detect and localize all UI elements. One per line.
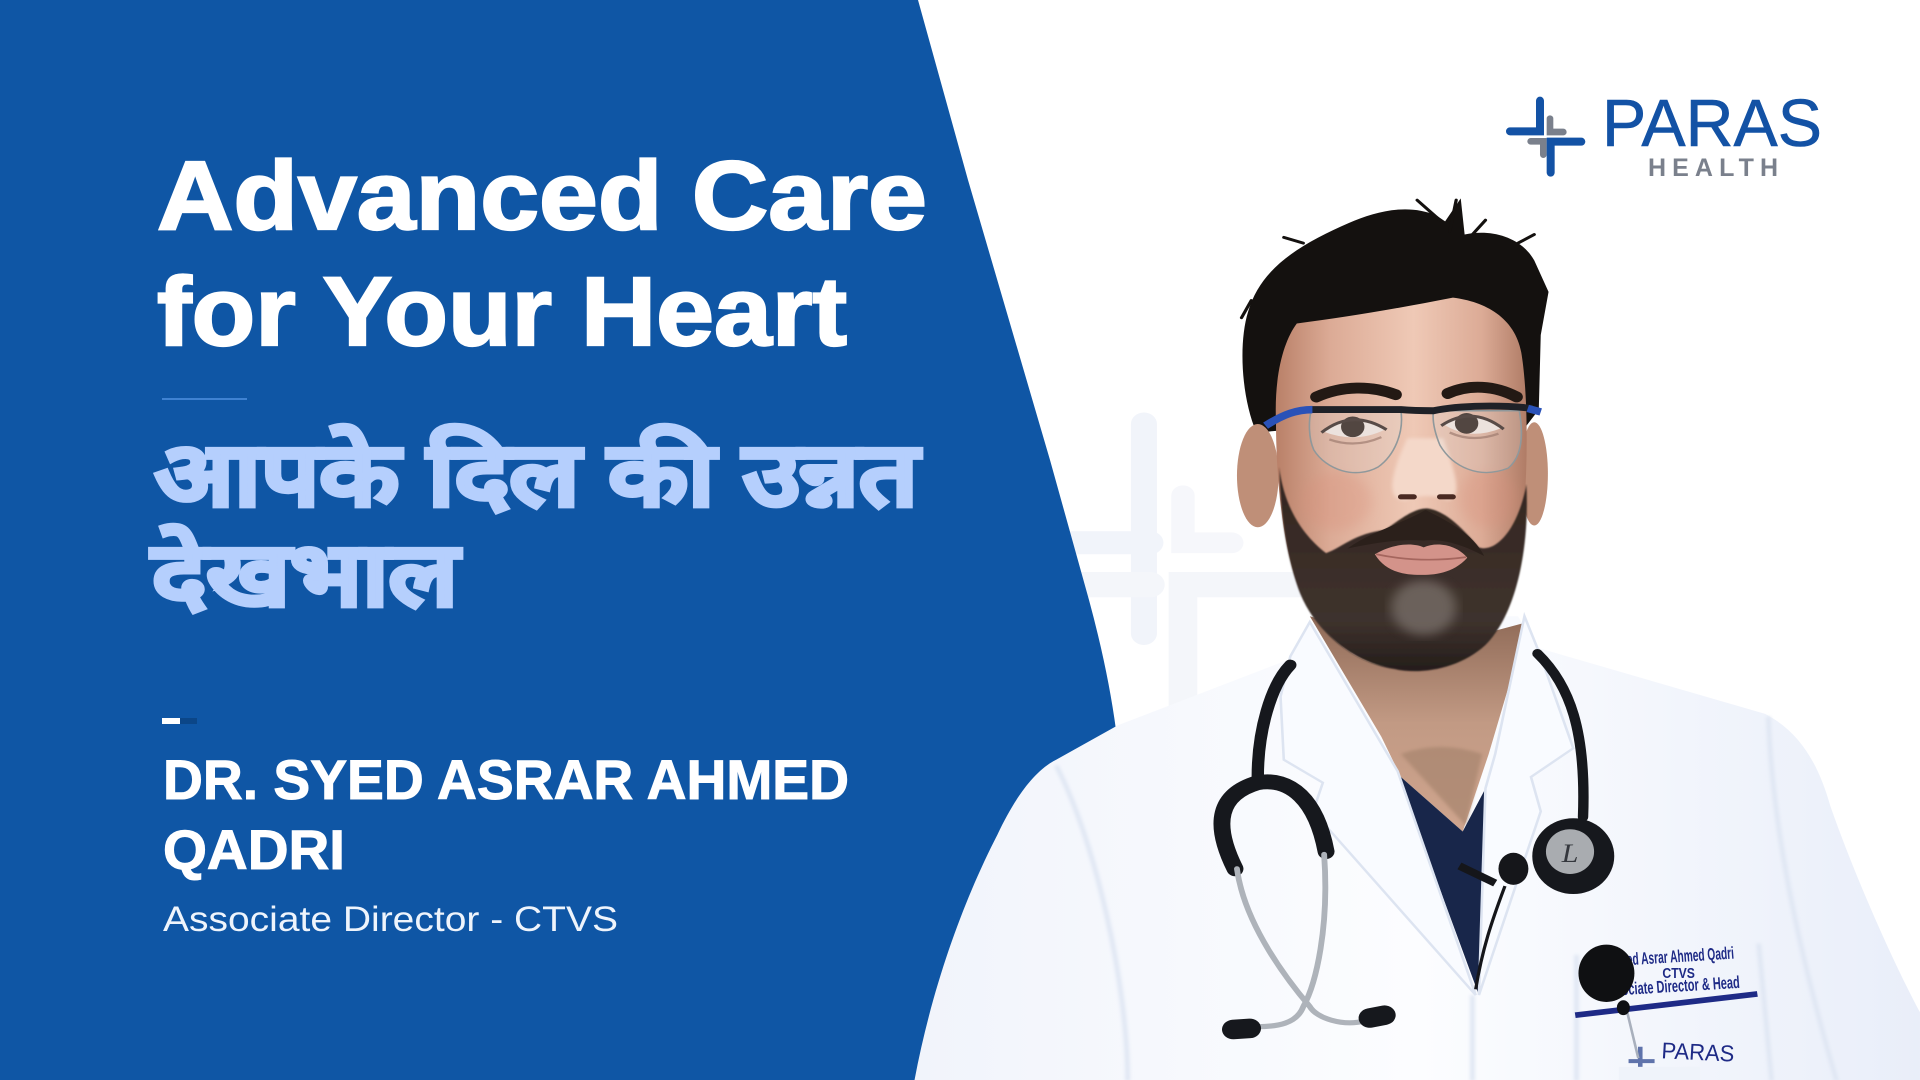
stray hair wisps (1242, 200, 1534, 318)
stethoscope ear tips (1233, 1015, 1385, 1030)
coat name badge: ociate Director & Head (1621, 972, 1740, 999)
logo wordmark: PARAS (1602, 86, 1822, 161)
glasses (1266, 406, 1541, 473)
beard (1279, 467, 1527, 671)
stethoscope right tube (1537, 654, 1583, 817)
stethoscope chest piece: L (1561, 839, 1578, 868)
badge card (1619, 1067, 1700, 1080)
scrubs (1398, 774, 1485, 995)
doctor designation: Associate Director - CTVS (163, 900, 618, 939)
hindi subtitle (150, 424, 921, 624)
badge reel (1578, 945, 1638, 1058)
title (157, 141, 927, 366)
nostrils (1401, 492, 1453, 501)
eyebrows (1316, 387, 1517, 397)
eyes (1322, 413, 1504, 444)
divider rule (162, 398, 247, 400)
hindi subtitle: देखभाल (150, 524, 462, 624)
coat (914, 616, 1920, 1080)
hair (1242, 198, 1549, 433)
coat name badge: ed Asrar Ahmed Qadri (1626, 943, 1735, 969)
accent dash (162, 718, 197, 724)
ears (1237, 422, 1548, 527)
blue panel (0, 0, 1116, 1080)
cheek blush (1300, 470, 1518, 530)
coat lapels (1281, 616, 1573, 995)
beard grey patch (1391, 580, 1456, 635)
coat name badge: CTVS (1662, 966, 1695, 982)
stethoscope binaural (1237, 854, 1365, 1027)
face (1276, 298, 1527, 668)
title: for Your Heart (157, 257, 847, 366)
coat shading (1056, 717, 1837, 1080)
moustache (1348, 510, 1484, 556)
stethoscope left tube (1258, 665, 1290, 777)
logo tagline: HEALTH (1648, 154, 1778, 182)
lips (1375, 544, 1467, 575)
stethoscope chest piece (1532, 818, 1614, 894)
stethoscope yoke (1222, 782, 1326, 869)
doctor portrait illustration (914, 198, 1920, 1080)
logo: Paras Health (1510, 86, 1822, 182)
stethoscope (1222, 654, 1583, 1030)
watermark: faint cross logo (1063, 424, 1316, 714)
lapel microphone (1459, 853, 1528, 989)
hindi subtitle: आपके दिल की उन्नत (155, 424, 921, 524)
nose (1392, 438, 1456, 500)
neck and chest (1310, 616, 1528, 831)
title: Advanced Care (157, 141, 927, 250)
icon: cross mark (1510, 101, 1581, 173)
doctor name: DR. SYED ASRAR AHMED (163, 748, 849, 811)
doctor name: QADRI (163, 818, 345, 881)
coat name badge: PARAS (1661, 1039, 1735, 1067)
doctor name (163, 748, 849, 881)
coat name badge (1575, 943, 1757, 1069)
